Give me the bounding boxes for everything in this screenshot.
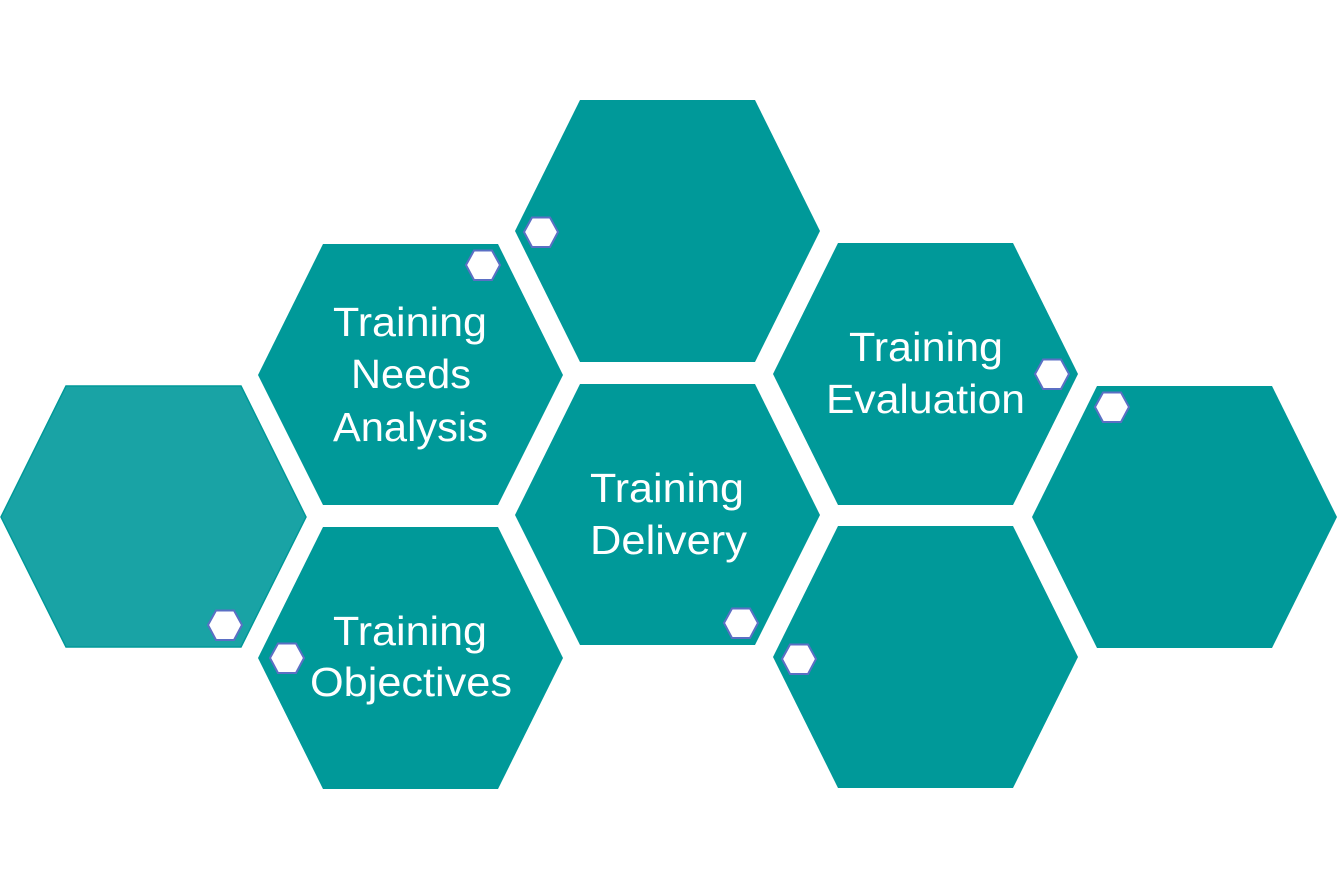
label: Training Delivery [590, 465, 748, 563]
hexagon: Training Evaluation [773, 243, 1078, 505]
label: Training Evaluation [826, 324, 1025, 422]
hexagon: bottom right empty [773, 526, 1078, 788]
hexagon: far right empty [1032, 386, 1337, 648]
marker: delivery [724, 608, 758, 638]
marker: needs analysis [466, 250, 500, 280]
hexagon: top empty [515, 100, 820, 362]
label: Training Needs Analysis: Needs [351, 351, 471, 397]
label: Training Objectives: Objectives [310, 659, 512, 705]
marker: evaluation [1035, 360, 1069, 389]
label: Training Evaluation: Training [849, 324, 1003, 370]
label: Training Needs Analysis [333, 299, 488, 450]
label: Training Evaluation: Evaluation [826, 376, 1025, 422]
label: Training Needs Analysis: Analysis [333, 404, 488, 450]
hexagon: Training Delivery [515, 384, 820, 645]
label: Training Needs Analysis: Training [333, 299, 487, 345]
label: Training Objectives [310, 608, 512, 705]
marker: bottom right hexagon [782, 644, 816, 674]
hexagon: left empty [1, 386, 306, 647]
label: Training Delivery: Delivery [590, 517, 748, 563]
label: Training Objectives: Training [333, 608, 487, 654]
marker: objectives [270, 644, 304, 673]
hexagon: Training Objectives [258, 527, 563, 789]
marker: top hexagon [524, 218, 558, 247]
marker: left hexagon [208, 610, 242, 640]
marker: far right hexagon [1095, 392, 1129, 422]
hexagon: Training Needs Analysis [258, 244, 563, 505]
label: Training Delivery: Training [590, 465, 744, 511]
